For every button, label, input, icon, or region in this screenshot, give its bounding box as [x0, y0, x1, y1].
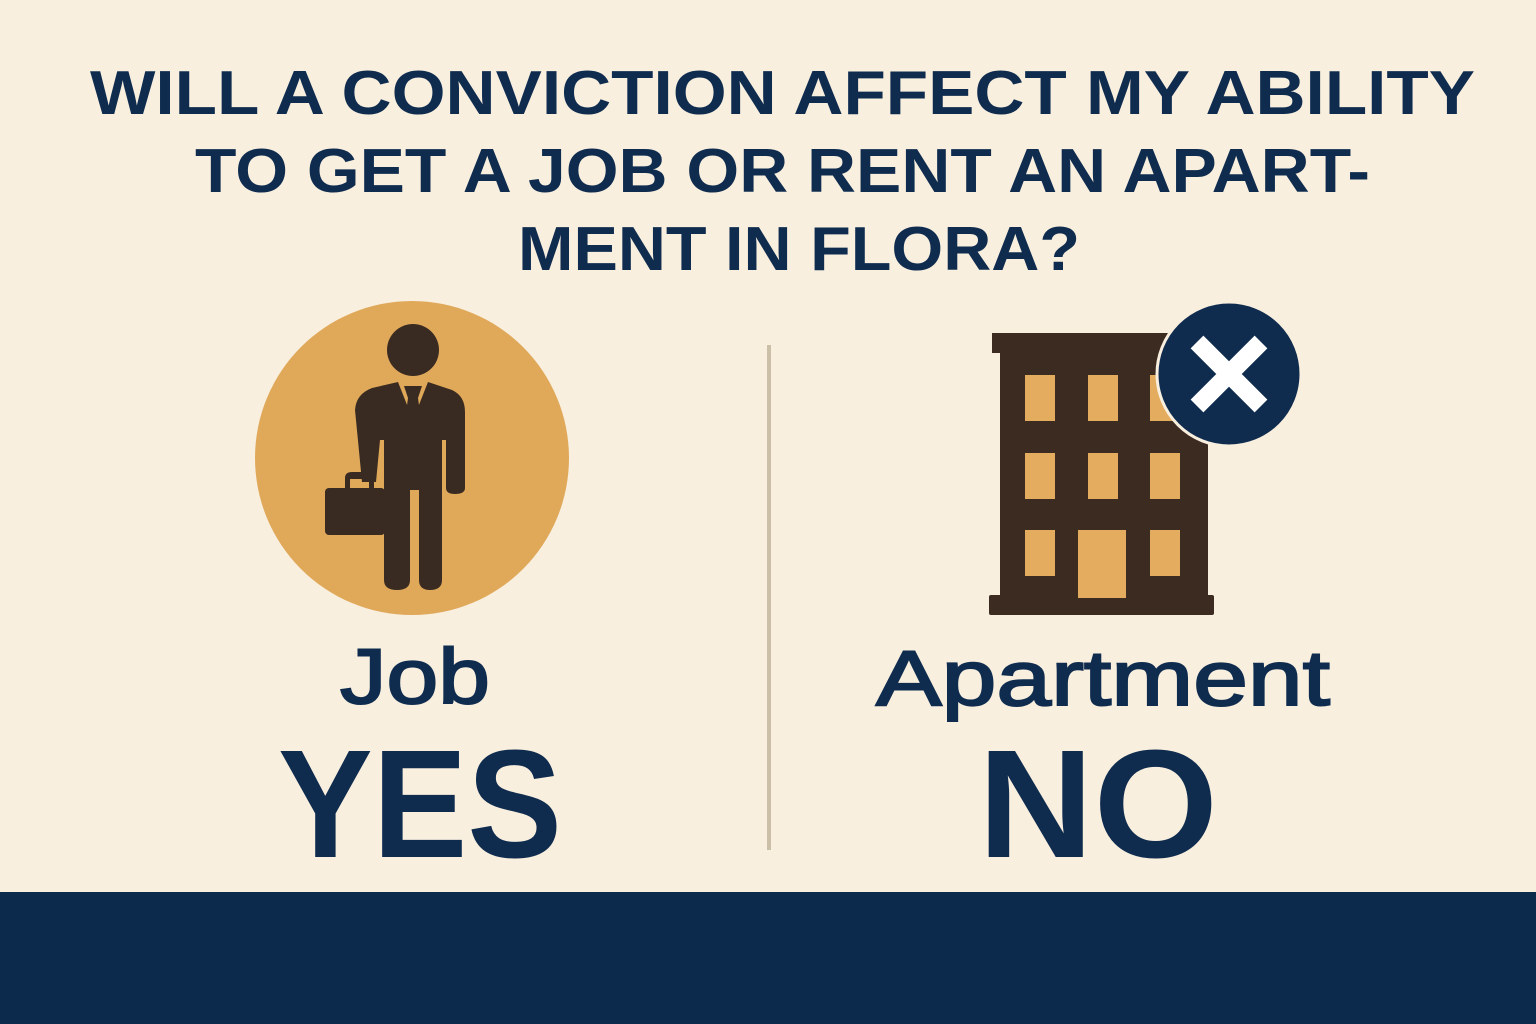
label: Apartment: Apartment: [876, 634, 1330, 722]
divider: [767, 345, 771, 850]
icon: job person in circle: [255, 301, 569, 615]
label: YES: YES: [278, 718, 562, 890]
icon: apartment building with X: [989, 302, 1301, 615]
title: [90, 59, 1475, 284]
footer bar: [0, 892, 1536, 1024]
label: Job: Job: [340, 632, 490, 720]
title: MENT IN FLORA?: [518, 215, 1080, 284]
label: NO: NO: [978, 718, 1218, 890]
title: TO GET A JOB OR RENT AN APART-: [195, 137, 1370, 206]
title: WILL A CONVICTION AFFECT MY ABILITY: [90, 59, 1475, 128]
